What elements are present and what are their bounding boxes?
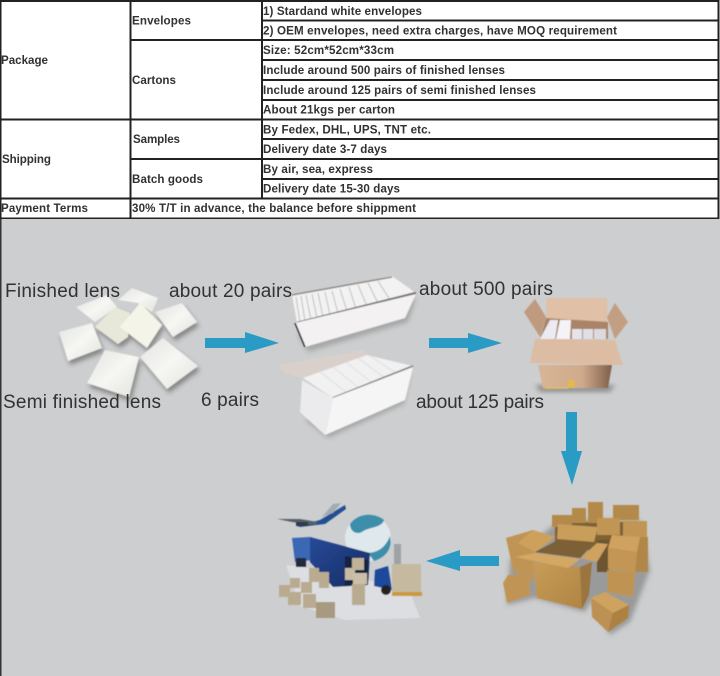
table text: Size: 52cm*52cm*33cm bbox=[263, 44, 394, 57]
arrow: stacked cartons to shipping bbox=[426, 550, 499, 571]
table text bbox=[1, 5, 617, 215]
label: about 500 pairs: about 500 pairs bbox=[419, 279, 553, 300]
table text: Envelopes bbox=[132, 14, 191, 28]
icon: scattered boxes bbox=[279, 568, 365, 618]
table text: Delivery date 15-30 days bbox=[263, 182, 400, 196]
icon: globe bbox=[345, 515, 391, 561]
icon: envelopes of lenses bbox=[59, 288, 200, 401]
icon: logistics plane, globe, truck and forklift bbox=[277, 503, 422, 620]
table text: Payment Terms bbox=[1, 202, 88, 215]
label: Finished lens: Finished lens bbox=[5, 281, 120, 302]
panel: packing flow background bbox=[0, 219, 720, 676]
icon: inner box with finished lens envelopes bbox=[292, 276, 416, 352]
table text: Cartons bbox=[132, 74, 176, 87]
arrow: boxes to carton bbox=[429, 333, 502, 353]
icon: inner box with semi finished lens envelopes bbox=[278, 350, 413, 438]
table text: Include around 125 pairs of semi finished lenses bbox=[263, 84, 536, 97]
table text: By Fedex, DHL, UPS, TNT etc. bbox=[263, 124, 431, 136]
arrow: envelopes to boxes bbox=[205, 332, 279, 353]
icon: open carton with boxes bbox=[524, 298, 628, 392]
table text: Delivery date 3-7 days bbox=[263, 143, 387, 156]
icon: truck bbox=[292, 537, 370, 587]
table text: Shipping bbox=[2, 153, 51, 166]
table text: Batch goods bbox=[132, 173, 203, 186]
table text: Package bbox=[1, 54, 49, 67]
label: about 20 pairs: about 20 pairs bbox=[169, 281, 292, 302]
panel: specification table bbox=[0, 0, 720, 220]
table text: About 21kgs per carton bbox=[263, 104, 395, 116]
label: about 125 pairs: about 125 pairs bbox=[416, 392, 544, 413]
table text: By air, sea, express bbox=[263, 163, 373, 176]
table text: 1) Stardand white envelopes bbox=[263, 5, 422, 18]
arrow: carton to stacked cartons bbox=[561, 412, 582, 485]
label: 6 pairs: 6 pairs bbox=[201, 390, 259, 411]
table text: 30% T/T in advance, the balance before shippment bbox=[132, 202, 416, 215]
table text: Include around 500 pairs of finished lenses bbox=[263, 64, 505, 77]
icon: pile of cartons bbox=[503, 502, 650, 635]
label: Semi finished lens: Semi finished lens bbox=[3, 392, 161, 413]
table text: 2) OEM envelopes, need extra charges, have MOQ requirement bbox=[263, 24, 617, 38]
table text: Samples bbox=[133, 133, 180, 146]
icon: forklift bbox=[374, 544, 422, 596]
icon: plane bbox=[277, 503, 346, 527]
